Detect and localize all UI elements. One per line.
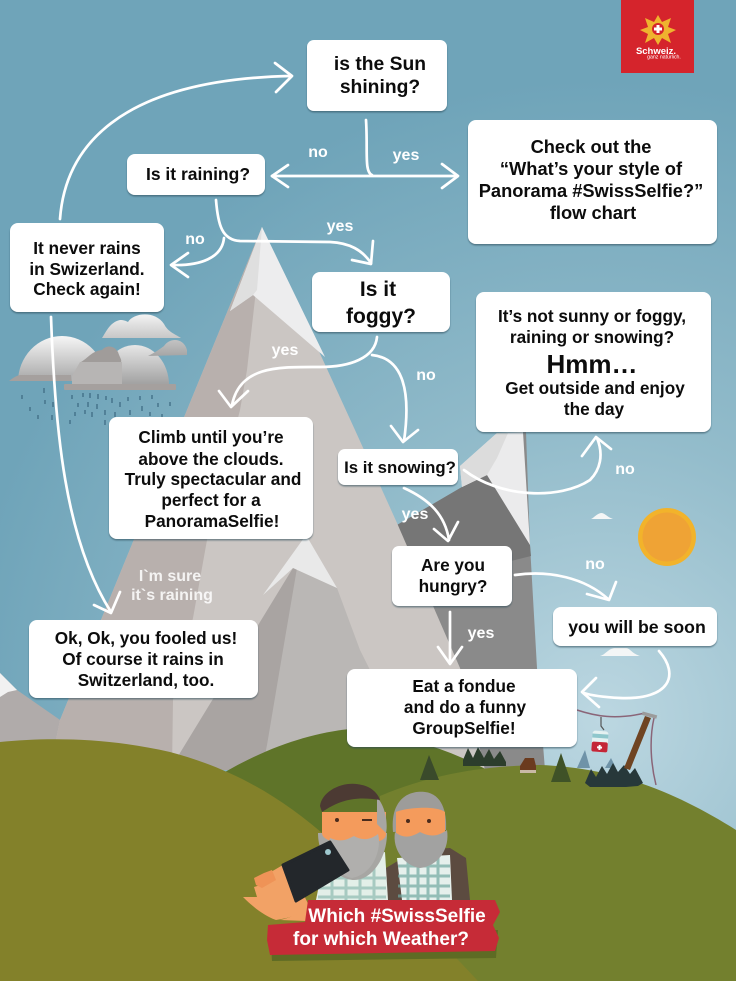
box: Is it foggy	[312, 272, 450, 332]
arrow: hungry to fondue	[438, 612, 462, 664]
right olive hill	[380, 765, 736, 981]
branch labels	[185, 144, 635, 642]
left olive hill	[0, 739, 478, 981]
arrow: sun to yes/no split	[272, 120, 458, 188]
logo: Schweiz tourism	[621, 0, 694, 73]
box: It never rains: in Swizerland.	[29, 259, 145, 279]
box: not sunny, Hmm: the day	[564, 399, 625, 419]
box: Check out the flow chart	[468, 120, 717, 244]
arrow: never rains to fooled us	[51, 317, 120, 613]
branch labels: no	[185, 231, 205, 248]
box: Eat a fondue: GroupSelfie!	[412, 718, 516, 738]
box: Climb until: PanoramaSelfie!	[145, 511, 279, 531]
box: Climb until: Climb until you’re	[138, 427, 284, 447]
branch labels: yes	[272, 342, 298, 359]
box: is the Sun shining	[307, 40, 447, 111]
box: Check out the flow chart: Panorama #SwissSelfie?”	[479, 180, 703, 201]
second foreground mountain	[172, 535, 420, 770]
box: Is it foggy: foggy?	[346, 305, 416, 328]
branch labels: no	[416, 367, 436, 384]
title banner	[267, 900, 500, 961]
box: Are you hungry: Are you	[421, 555, 485, 575]
box: Is it snowing	[338, 449, 458, 485]
logo: Schweiz tourism: Schweiz.	[636, 46, 676, 57]
box: not sunny, Hmm: Get outside and enjoy	[505, 378, 685, 398]
branch labels: yes	[468, 625, 494, 642]
arrow: raining to never rains	[171, 238, 224, 277]
cabin and trees	[420, 747, 643, 787]
box: Check out the flow chart: “What’s your style of	[500, 158, 683, 179]
arrow: foggy to snowing	[372, 355, 418, 442]
box: Ok, Ok: Ok, Ok, you fooled us!	[55, 628, 237, 648]
box: Eat a fondue: and do a funny	[404, 697, 527, 717]
arrow: snowing to sunny box	[464, 437, 611, 493]
box: Climb until: perfect for a	[161, 490, 261, 510]
box: is the Sun shining: shining?	[340, 77, 420, 98]
box: Is it snowing: Is it snowing?	[344, 458, 456, 477]
box: It never rains: Check again!	[33, 279, 141, 299]
box: It never rains: It never rains	[33, 238, 141, 258]
branch labels: yes	[402, 506, 428, 523]
box: Check out the flow chart: flow chart	[550, 202, 636, 223]
arrow: never rains back to sun	[60, 63, 292, 219]
box: Ok, Ok: Switzerland, too.	[78, 670, 214, 690]
box: not sunny, Hmm: raining or snowing?	[510, 327, 674, 347]
box: Eat a fondue	[347, 669, 577, 747]
characters: two Swiss men	[243, 784, 470, 921]
main central mountain	[50, 227, 485, 770]
sun	[638, 508, 696, 566]
box: Is it foggy: Is it	[360, 278, 396, 301]
branch labels: no	[615, 461, 635, 478]
box: Ok, Ok	[29, 620, 258, 698]
right dark mountain	[397, 432, 545, 770]
box: not sunny, Hmm: Hmm…	[546, 349, 638, 379]
branch labels: yes	[327, 218, 353, 235]
title banner: for which Weather?	[293, 929, 469, 950]
box: not sunny, Hmm	[476, 292, 711, 432]
background far mountains	[0, 673, 616, 768]
box: Climb until	[109, 417, 313, 539]
box: Ok, Ok: Of course it rains in	[62, 649, 224, 669]
note: I'm sure it's raining: I`m sure	[139, 568, 201, 585]
box: Is it raining	[127, 154, 265, 195]
small clouds right	[591, 513, 640, 656]
box: you will be soon: you will be soon	[568, 617, 706, 637]
box: Climb until: Truly spectacular and	[125, 469, 301, 489]
rain clouds	[9, 314, 187, 428]
note: I'm sure it's raining: it`s raining	[131, 587, 213, 604]
note: I'm sure it's raining	[131, 568, 213, 604]
arrow: raining to foggy	[216, 200, 373, 264]
box: Are you hungry	[392, 546, 512, 606]
cable car	[577, 710, 657, 785]
box: Is it raining: Is it raining?	[146, 164, 250, 184]
arrow: soon to fondue	[582, 651, 669, 707]
branch labels: no	[308, 144, 328, 161]
arrow: foggy to climb	[219, 337, 377, 407]
box: Check out the flow chart: Check out the	[531, 136, 651, 157]
box: Climb until: above the clouds.	[138, 449, 284, 469]
box: It never rains	[10, 223, 164, 312]
logo: Schweiz tourism: ganz natürlich.	[647, 54, 681, 60]
dark green hill	[220, 729, 520, 981]
title banner: Which #SwissSelfie	[308, 906, 486, 927]
box: Eat a fondue: Eat a fondue	[412, 676, 516, 696]
arrow: hungry to soon	[515, 574, 616, 600]
box: Are you hungry: hungry?	[419, 576, 487, 596]
arrow: snowing to hungry	[404, 488, 458, 541]
branch labels: yes	[393, 147, 419, 164]
box: you will be soon	[553, 607, 717, 646]
box: not sunny, Hmm: It’s not sunny or foggy,	[498, 306, 686, 326]
box: is the Sun shining: is the Sun	[334, 54, 426, 75]
branch labels: no	[585, 556, 605, 573]
